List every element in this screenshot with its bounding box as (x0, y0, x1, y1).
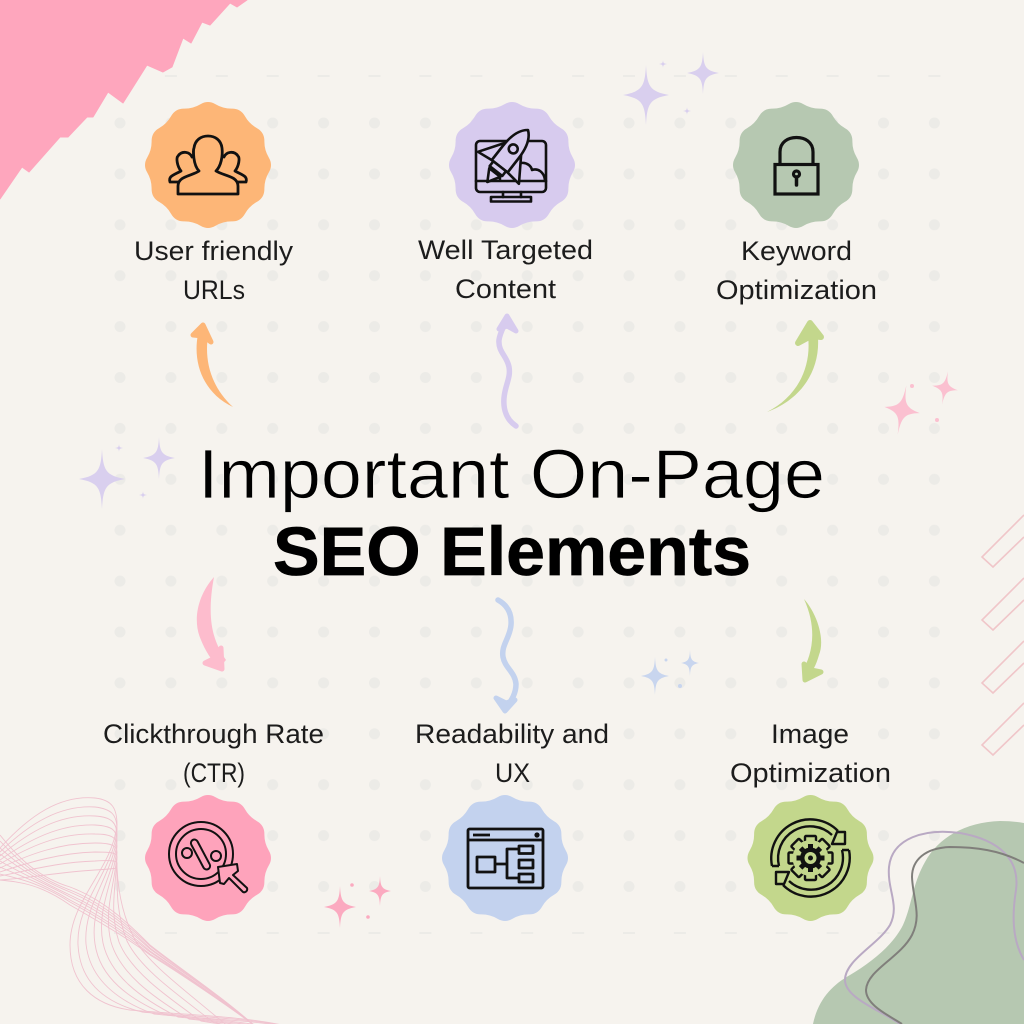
badge: pink (145, 795, 271, 921)
item: readability and UX (415, 719, 609, 921)
label: User friendly (134, 236, 294, 266)
title: SEO Elements (273, 513, 751, 590)
sparkles: left purple (79, 437, 175, 509)
icon: gear with cycle arrows (771, 819, 850, 897)
pink line wave (0, 798, 290, 1024)
pink torn corner shape (0, 0, 247, 199)
green blob, bottom right (813, 821, 1024, 1024)
item: user friendly URLs (134, 102, 294, 305)
badge: orange (145, 102, 271, 228)
badge: blue (442, 795, 568, 921)
icon: monitor and rocket (467, 114, 548, 202)
arrow: lime up (767, 323, 821, 412)
arrow: purple (499, 316, 516, 426)
label: UX (495, 758, 530, 788)
sparkles: bottom pink (324, 876, 391, 928)
label: URLs (183, 275, 245, 305)
label: Optimization (716, 275, 877, 305)
item: clickthrough rate (103, 719, 324, 921)
sparkles: blue (641, 650, 699, 695)
label: Image (771, 719, 849, 749)
pink diagonal bars (982, 515, 1024, 755)
label: Optimization (730, 758, 891, 788)
arrow: lime down (802, 599, 821, 680)
label: (CTR) (183, 758, 245, 788)
icon: padlock (775, 138, 818, 194)
sparkles: right pink (880, 369, 961, 438)
badge: sage (733, 102, 859, 228)
icon: percent with cursor (169, 822, 247, 892)
badge: purple (449, 102, 575, 228)
purple outline squiggle (845, 832, 1024, 1024)
item: well targeted content (418, 102, 593, 304)
label: Clickthrough Rate (103, 719, 324, 749)
item: image optimization (730, 719, 891, 921)
label: Keyword (741, 236, 852, 266)
grey outline squiggle (866, 847, 1024, 1024)
arrow: blue down (496, 600, 516, 711)
item: keyword optimization (716, 102, 877, 305)
label: Readability and (415, 719, 609, 749)
title (198, 435, 825, 590)
icon: users (170, 136, 246, 194)
label: Well Targeted (418, 235, 593, 265)
sparkles: top purple (623, 52, 719, 125)
title: Important On-Page (198, 435, 825, 513)
arrow: orange (193, 325, 233, 407)
arrow: pink down (197, 577, 226, 669)
badge: lime (747, 795, 874, 921)
label: Content (455, 274, 557, 304)
icon: window with diagram (468, 829, 543, 888)
dot grid background (95, 76, 960, 933)
